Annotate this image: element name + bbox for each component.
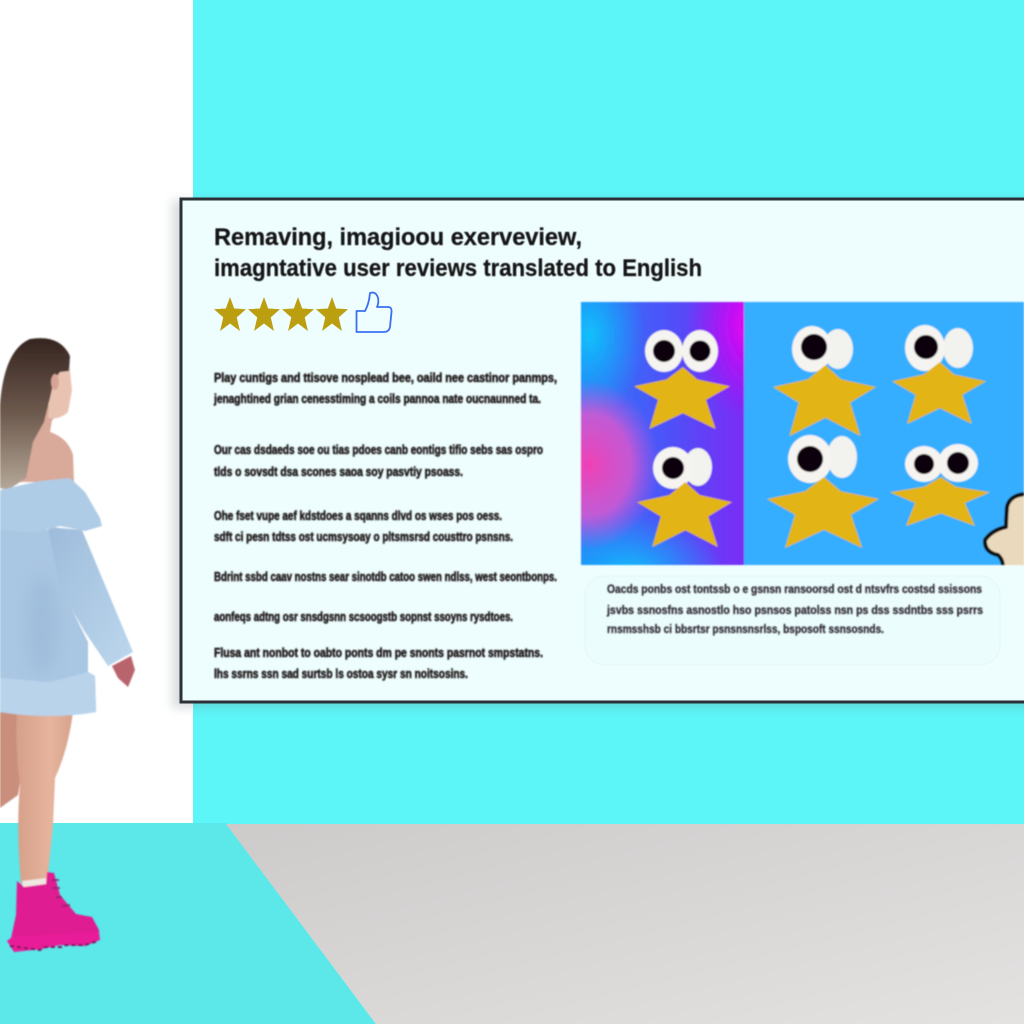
hand — [112, 656, 135, 687]
cyan back wall — [193, 0, 1024, 824]
star character 1 — [634, 330, 730, 429]
review text: Ohe fset vupe aef kdstdoes a sqanns dlvd os wses pos oess. — [214, 509, 502, 523]
left gradient background — [580, 300, 746, 566]
review text: lhs ssrns ssn sad surtsb ls ostoa sysr sn noitsosins. — [214, 667, 468, 681]
right blue background — [744, 302, 1024, 565]
dress hem ruffle — [0, 672, 96, 716]
review text: Bdrint ssbd caav nostns sear sinotdb catoo swen ndlss, west seontbonps. — [214, 570, 557, 584]
woman figure — [0, 338, 135, 952]
white sock — [22, 878, 47, 888]
sleeve — [48, 527, 133, 666]
pink boot — [7, 872, 100, 952]
review text: aonfeqs adtng osr snsdgsnn scsoogstb sopnst ssoyns rysdtoes. — [214, 610, 513, 624]
review text: Play cuntigs and ttisove nosplead bee, oaild nee castinor panmps, — [214, 371, 557, 385]
image panel: googly-eyed stars — [580, 300, 1024, 566]
icon: thumbs up — [356, 293, 392, 332]
caption card — [585, 576, 1000, 665]
star character 4 — [892, 325, 986, 424]
caption card: rnsmsshsb ci bbsrtsr psnsnsnsrlss, bsposoft ssnsosnds. — [607, 624, 884, 636]
back leg — [0, 712, 22, 808]
heading: imagntative user reviews translated to English — [214, 255, 702, 282]
review text — [213, 371, 557, 681]
caption card: Oacds ponbs ost tontssb o e gsnsn ransoorsd ost d ntsvfrs costsd ssissons — [607, 584, 982, 596]
caption card: jsvbs ssnosfns asnostlo hso psnsos patolss nsn ps dss ssdntbs sss psrrs — [606, 605, 983, 617]
heading: Remaving, imagioou exerveview, — [214, 224, 582, 251]
panel shadow — [172, 200, 1024, 708]
star character 2 — [637, 447, 732, 547]
review text: Flusa ant nonbot to oabto ponts dm pe snonts pasrnot smpstatns. — [214, 646, 543, 660]
review text: sdft ci pesn tdtss ost ucmsysoay o pltsmsrsd cousttro psnsns. — [214, 530, 513, 544]
star character 3 — [773, 326, 876, 436]
star character 6 — [890, 444, 990, 526]
grey floor — [226, 824, 1024, 1024]
star rating — [214, 297, 348, 331]
ear — [51, 374, 59, 390]
face — [48, 362, 72, 418]
front leg — [16, 712, 73, 884]
review text: Our cas dsdaeds soe ou tias pdoes canb eontigs tifio sebs sas ospro — [214, 443, 543, 457]
hair — [0, 338, 70, 490]
review panel — [181, 199, 1024, 702]
dress body shading — [26, 575, 58, 675]
heading — [214, 224, 702, 282]
off-shoulder ruffle — [0, 478, 102, 533]
review text: tlds o sovsdt dsa scones saoa soy pasvtiy psoass. — [214, 465, 463, 479]
star character 5 — [767, 435, 879, 548]
cartoon hand — [985, 494, 1024, 572]
review text: jenaghtined grian cenesstiming a coils pannoa nate oucnaunned ta. — [213, 392, 541, 406]
neck and shoulder — [20, 405, 74, 482]
teal floor — [0, 823, 376, 1024]
white side wall — [0, 0, 193, 823]
dress body — [0, 530, 96, 716]
